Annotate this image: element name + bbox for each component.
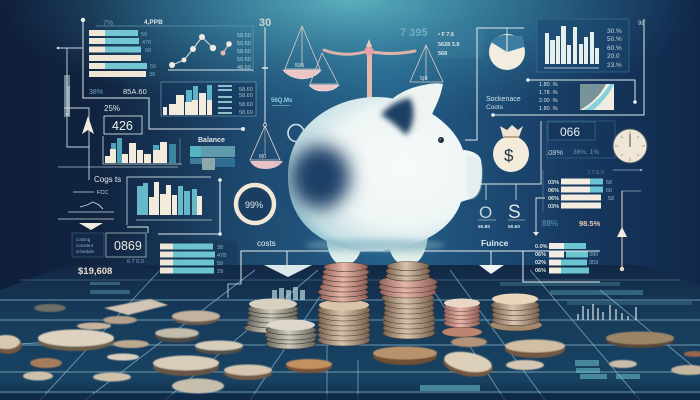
label: sockenace costs: 2.00 .%: [539, 98, 558, 104]
costs box with arrow: [228, 239, 600, 298]
right bar list top: 98.5%: [579, 219, 601, 228]
small caption: 56Q.Ms: [271, 98, 293, 104]
right connector lines: 98: [638, 21, 645, 27]
lower bar list: 59: [217, 261, 223, 267]
top number block: 7 395: [400, 27, 428, 39]
left bar list panel: 56: [150, 64, 156, 70]
coin stack tall right: [379, 262, 437, 339]
lower bar list: 38: [217, 245, 223, 251]
right bar list top: 88%: [542, 219, 558, 228]
left bar list panel: 38: [149, 72, 155, 78]
bar chart with legend: 58.60: [239, 93, 253, 99]
left bar list panel: [81, 18, 253, 131]
left side axis with arrow: [57, 47, 94, 180]
label: sockenace costs: Sockenace: [486, 96, 521, 103]
label: sockenace costs: 1.80 .%: [539, 106, 558, 112]
lower right bar list: 06%: [535, 252, 546, 258]
top number block: 568: [438, 51, 447, 57]
scales of justice: 595: [295, 63, 304, 69]
small notes box and big number: $19,608: [78, 266, 112, 277]
line chart: 58.60: [237, 49, 251, 55]
left bar list panel: 85A.60: [123, 87, 147, 96]
bar chart with legend: 58.60: [239, 87, 253, 93]
mini trend icon: [58, 202, 114, 230]
line chart: 50.60: [237, 57, 251, 63]
coin stack copper: [442, 298, 482, 337]
coins on floor: [0, 299, 700, 394]
top number block: 5628 3.8: [438, 42, 459, 48]
connector with dot: [158, 178, 222, 236]
fuince label and arrow: Fuince: [481, 238, 509, 248]
fuince label and arrow: [423, 238, 600, 282]
right bar list top: 58: [608, 196, 614, 202]
coin stack front: [265, 320, 317, 349]
value box 426: 25%: [104, 104, 120, 113]
right bar list top: 03%: [548, 180, 559, 186]
coin stack left: [244, 298, 298, 333]
bars with percent list: 23.%: [607, 62, 622, 69]
bars with percent list: [537, 19, 629, 72]
label: sockenace costs: 1.80 .%: [539, 82, 558, 88]
vertical 30 axis and scale pans: 30: [259, 17, 271, 29]
top number block: [400, 27, 484, 58]
coin stack gold: [490, 294, 542, 331]
line chart: 48.60: [237, 65, 251, 71]
bar chart with legend: [161, 82, 256, 116]
right bar list top: 58: [606, 180, 612, 186]
left bar list panel: 7%: [103, 20, 113, 27]
bar chart with legend: 58.60: [239, 102, 253, 108]
bars with percent list: 20.0: [607, 53, 620, 60]
lower right bar list: 359: [589, 260, 598, 266]
small notes box and big number: 0869: [114, 239, 142, 253]
bar chart large: [127, 177, 212, 233]
lower bar list: [158, 241, 238, 276]
right bar list top: 7.7.6.0: [587, 170, 604, 176]
left side axis with arrow: Assessment: [66, 86, 72, 116]
O and S symbols: O: [479, 203, 492, 222]
lower right bar list: 02%: [535, 260, 546, 266]
right bar list top: 06%: [548, 196, 559, 202]
bars with percent list: 30.%: [607, 28, 622, 35]
balance legend: Balance: [198, 137, 225, 144]
lower right bar list: 390: [589, 252, 598, 258]
right bar list top: 60: [606, 188, 612, 194]
left bar list panel: 38%: [89, 89, 103, 96]
right bar list top: 06%: [548, 188, 559, 194]
value box 066: .08%: [546, 148, 563, 157]
line chart: 58.60: [237, 33, 251, 39]
O and S symbols: 50.60: [508, 224, 520, 230]
label: sockenace costs: 1.78 .%: [539, 90, 558, 96]
value box 066: 066: [560, 125, 580, 139]
bars with percent list: 50.%: [607, 36, 622, 43]
O and S symbols: S: [508, 202, 521, 223]
value box 426: [104, 104, 142, 134]
left bar list panel: 4,PPB: [144, 19, 163, 26]
lower bar list: 478: [217, 253, 226, 259]
lower right bar list: 0.0%: [535, 244, 548, 250]
costs label: FCC: [97, 190, 108, 196]
scales of justice: [283, 26, 443, 100]
donut 99%: [236, 185, 274, 223]
pie chart and connector: [465, 28, 525, 140]
clock: [613, 129, 647, 163]
bars with percent list: 60.%: [607, 45, 622, 52]
small area chart: [580, 84, 614, 110]
coin stack tall left: [318, 262, 370, 346]
right connector lines: [491, 19, 645, 117]
scales of justice: 5|0: [420, 76, 428, 82]
bottom edge shade: [0, 394, 700, 400]
costs label: Cogs ts: [94, 175, 121, 184]
lower right bar list: 06%: [535, 268, 546, 274]
small notes box and big number: 6.7 6.0: [127, 259, 144, 265]
right bar list top: [465, 121, 642, 228]
small notes box and big number: schedule: [76, 249, 95, 254]
right bar list top: 03%: [548, 204, 559, 210]
lower right bar list: [535, 243, 598, 274]
small notes box and big number: [72, 233, 146, 277]
value box 066: 36%. 1%: [573, 149, 599, 156]
value box 426: 426: [112, 119, 133, 133]
balance legend: [190, 137, 235, 170]
label: sockenace costs: Coots: [486, 104, 504, 111]
money bag icon: $: [504, 146, 514, 165]
lower right arrow: [617, 191, 641, 271]
small notes box and big number: costing: [76, 237, 91, 242]
O and S symbols: 50.80: [478, 224, 490, 230]
costs box with arrow: costs: [257, 239, 276, 248]
left bar list panel: 59: [141, 32, 147, 38]
line chart: 50.60: [237, 41, 251, 47]
costs label: [73, 175, 121, 196]
lower bar list: 29: [217, 269, 223, 275]
left bar list panel: 68: [145, 48, 151, 54]
piggy bank: [288, 83, 482, 265]
value box 066: [546, 121, 615, 158]
top number block: • F 7.6: [438, 32, 454, 38]
O and S symbols: [478, 184, 525, 230]
connector to lower list: [533, 198, 545, 236]
donut 99%: 99%: [245, 200, 263, 210]
bar chart with legend: 58.60: [239, 110, 253, 116]
floor grid: [0, 265, 700, 400]
vertical 30 axis and scale pans: 8|0: [259, 154, 266, 160]
vertical 30 axis and scale pans: [250, 17, 283, 169]
line chart: [168, 33, 253, 71]
money bag icon: [493, 125, 529, 172]
left bar list panel: 478: [142, 40, 151, 46]
small notes box and big number: constant: [76, 243, 94, 248]
label: sockenace costs: [486, 82, 558, 112]
bar chart 426: [58, 136, 182, 167]
